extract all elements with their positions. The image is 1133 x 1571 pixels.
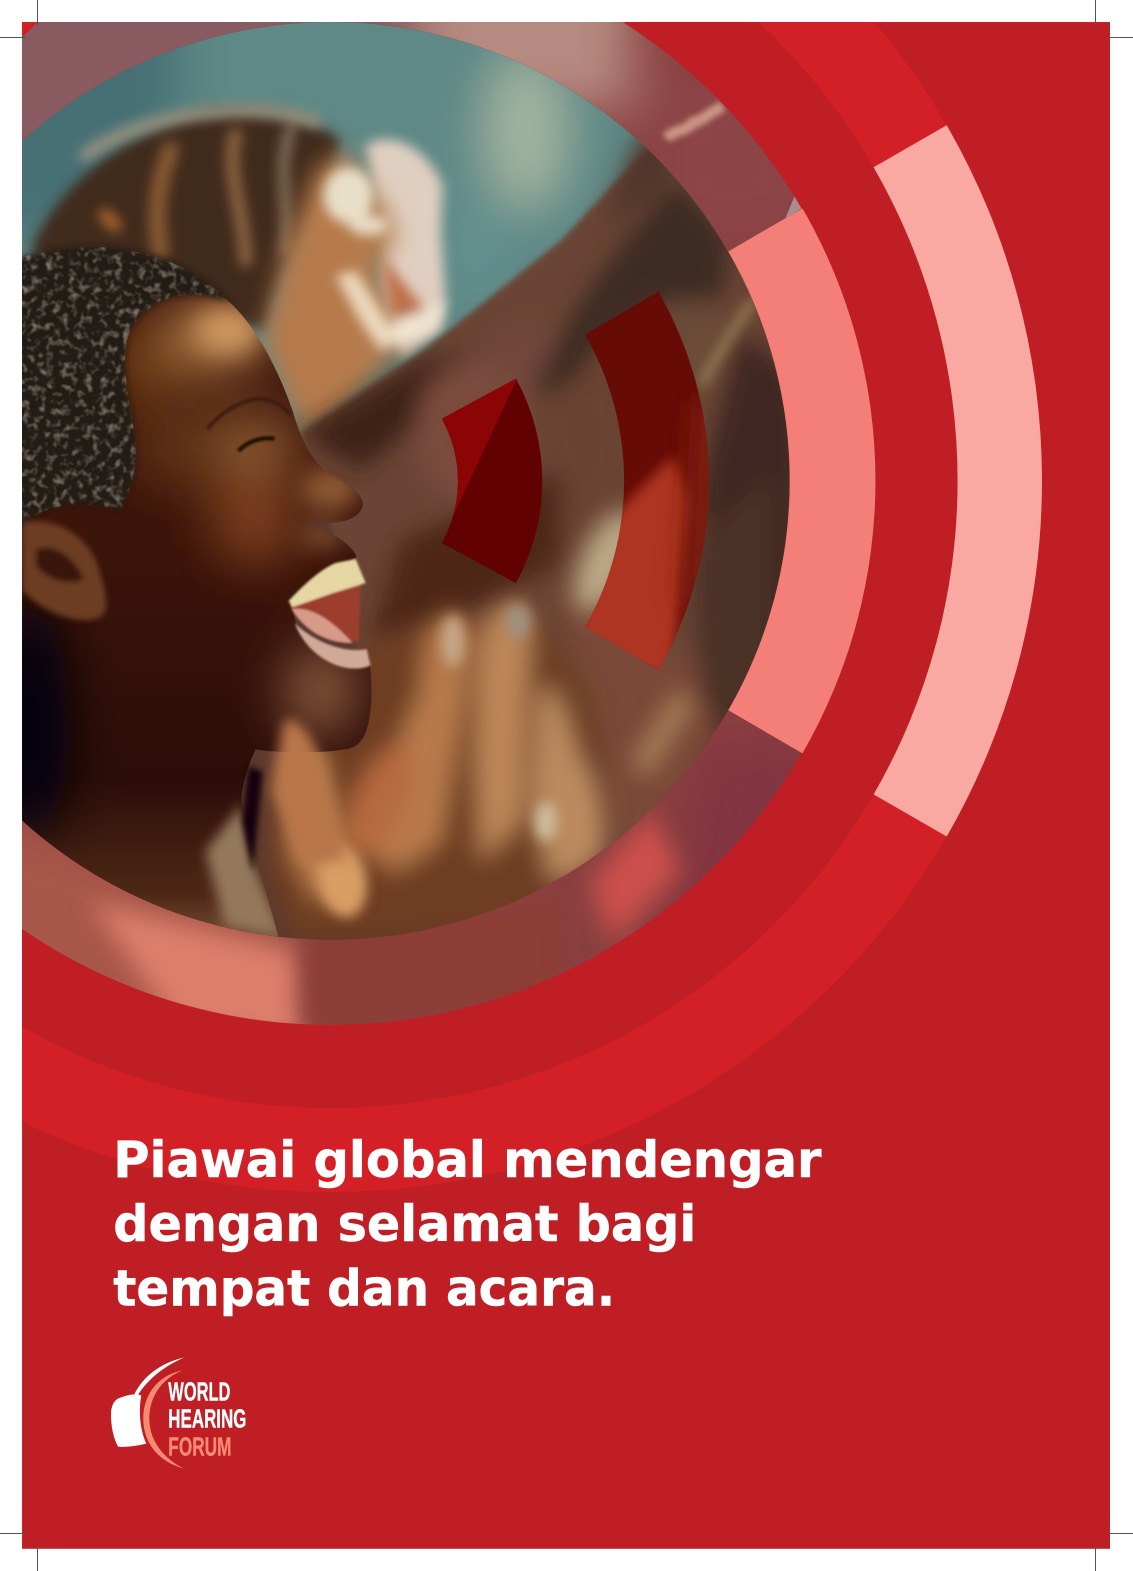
back person: raised hand [366,140,446,361]
back person: hair [30,110,341,331]
ring: grey sliver [785,196,801,218]
translucent photo ring [22,22,802,1025]
logo: World Hearing Forum [111,1357,246,1469]
corner accent [22,22,38,37]
raised arm [300,148,774,656]
lens flare streak [701,301,753,386]
woman: neck light [205,804,283,937]
icon: crescent [143,1370,184,1469]
photo: cheering woman [0,0,902,1042]
ring: warm skin patch [90,902,303,1042]
logo wordmark: FORUM [168,1432,231,1462]
arm shading [301,130,801,852]
ring: squiggle highlight [666,106,723,138]
woman: eye and brow [207,399,291,451]
logo wordmark [168,1377,246,1462]
woman: base skin with shading [22,294,372,936]
woman: ear [22,521,106,620]
title: dengan selamat bagi [113,1195,696,1253]
outer bright red ring [22,22,946,1192]
ring: shaded patch [306,902,561,1032]
teal sky backdrop [0,0,761,441]
pink arc in ring [728,208,875,753]
dark shadow by the hand [242,766,262,872]
logo wordmark: WORLD [168,1377,230,1407]
artwork: concentric rings and photo [0,0,1042,1192]
front finger over chin [272,720,346,862]
logo wordmark: HEARING [168,1404,246,1434]
ring: pink patch [591,811,681,942]
title: Piawai global mendengar [113,1131,822,1189]
title: tempat dan acara. [113,1259,615,1317]
small sound-wave arc [442,378,542,583]
hair texture [22,247,223,518]
title [113,1131,822,1317]
large sound-wave arc [585,292,709,670]
middle dark red ring [0,0,958,1108]
woman: hair [0,247,228,526]
light streak lower right [641,696,686,771]
light pink arc in outer ring [874,125,1042,837]
clasped hands [265,601,609,942]
back person: face [262,150,406,431]
pale highlight by forearm [560,498,624,624]
woman: mouth [289,559,371,669]
icon: headphone [111,1357,184,1447]
